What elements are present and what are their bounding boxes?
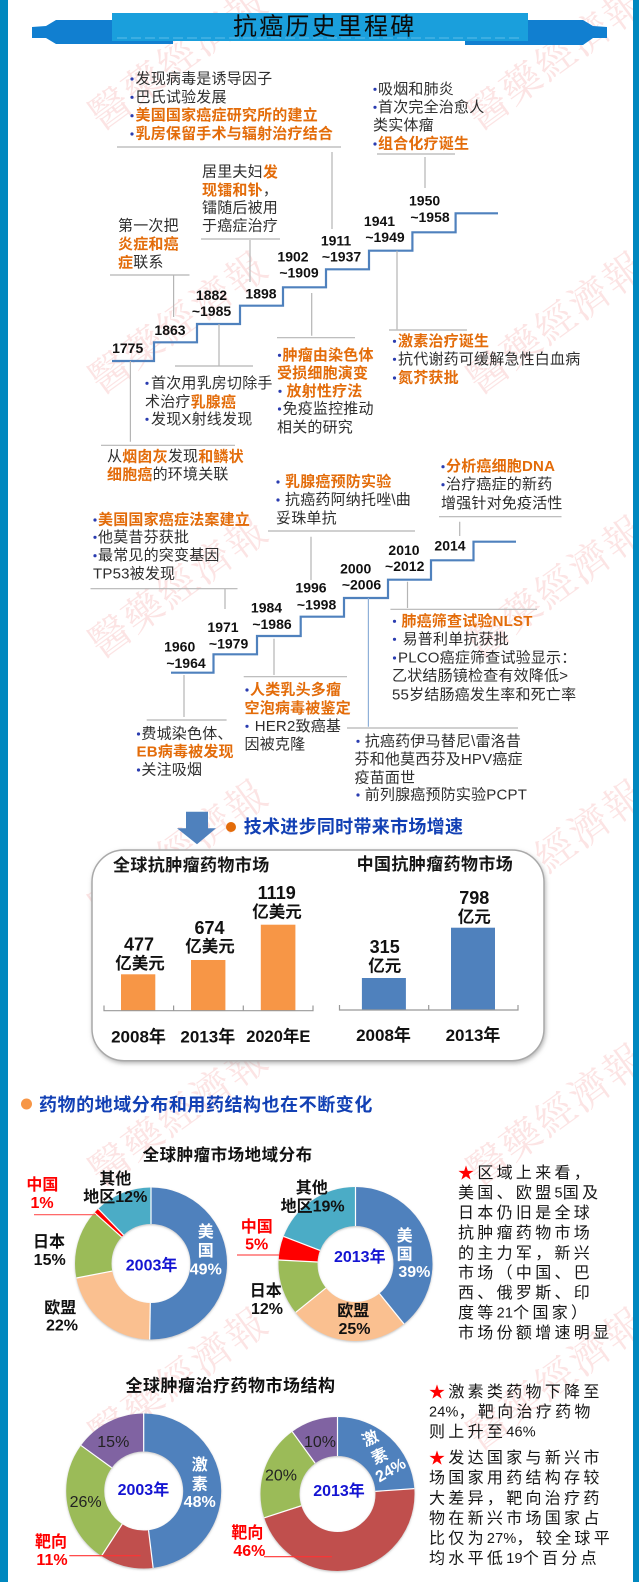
- donut chart: 2003 region: 国: [198, 1243, 214, 1260]
- donut chart: 2003 region: 中国: [26, 1176, 58, 1194]
- donut chart: 2013 structure: 激: [360, 1427, 382, 1450]
- timeline lower staircase: 1996: [295, 580, 327, 596]
- watermark: 醫藥經濟報: [75, 1292, 279, 1461]
- timeline upper staircase: 1863: [154, 322, 186, 338]
- callout: 2000-2006: 芬和他莫西芬及HPV癌症: [354, 751, 523, 768]
- timeline upper staircase: ~1958: [410, 209, 450, 225]
- side border right: [633, 0, 639, 1582]
- timeline lower staircase: ~2012: [385, 558, 425, 574]
- donut chart: 2013 region: 25%: [338, 1321, 371, 1338]
- callout: 1950-1958: 组合化疗诞生: [378, 134, 469, 152]
- donut chart: 2013 structure: 2013年: [313, 1481, 365, 1500]
- callout: 1863: 炎症和癌: [118, 235, 179, 253]
- bar chart: China market: 315: [370, 937, 400, 957]
- donut chart: 2013 region: 日本: [250, 1282, 282, 1300]
- callout: 2010-2012: 肺癌筛查试验NLST: [401, 612, 533, 630]
- donut chart: 2003 region: [26, 1170, 222, 1339]
- timeline lower staircase: ~1979: [209, 635, 248, 651]
- title: 抗癌历史里程碑: [233, 14, 416, 40]
- bar chart: China market: 中国抗肿瘤药物市场: [357, 854, 513, 874]
- bar chart: global market: 1119: [258, 883, 296, 903]
- callout: 1775: 从烟囱灰发现和鳞状: [107, 447, 244, 465]
- callout: 2014: [439, 457, 563, 536]
- side border left: [0, 0, 8, 1582]
- timeline lower staircase: ~1998: [297, 596, 336, 612]
- callout: 1984-1986: 人类乳头多瘤: [250, 680, 341, 698]
- callout: 2014: 治疗癌症的新药: [446, 476, 552, 493]
- callout: 1960-1964: 关注吸烟: [141, 762, 202, 778]
- callout: 1902-1909: 放射性疗法: [286, 382, 363, 400]
- callout: 1950-1958: 类实体瘤: [373, 117, 434, 134]
- callout: 1863: [110, 216, 190, 317]
- bar chart: China market: 798: [459, 888, 489, 908]
- timeline lower staircase: ~1986: [252, 616, 292, 632]
- callout: 1911-1937: 巴氏试验发展: [136, 89, 227, 106]
- timeline upper staircase: 1950: [409, 193, 440, 209]
- callout: 2010-2012: 易普利单抗获批: [403, 631, 509, 648]
- text block: structure commentary: 则上升至46%: [429, 1423, 536, 1441]
- donut chart: 2013 structure: 靶向: [231, 1524, 263, 1542]
- donut chart: 2013 region: 中国: [241, 1218, 273, 1236]
- text block: structure commentary: 物在新兴市场国家占: [429, 1510, 603, 1528]
- donut chart: 2003 structure: 11%: [36, 1552, 68, 1569]
- donut chart: 2013 region: [237, 1179, 430, 1338]
- watermark: 醫藥經濟報: [75, 236, 279, 405]
- callout: 1902-1909: 相关的研究: [277, 419, 353, 436]
- callout: 1984-1986: HER2致癌基: [255, 718, 341, 735]
- bar chart: China market: 2008年: [356, 1025, 411, 1045]
- text block: structure commentary: 大差异，靶向治疗药: [429, 1490, 603, 1508]
- callout: 1984-1986: 因被克隆: [244, 736, 305, 753]
- timeline upper staircase: ~1909: [279, 265, 319, 281]
- callout: 1960-1964: 费城染色体、: [141, 726, 233, 742]
- callout: 1911-1937: 美国国家癌症研究所的建立: [136, 106, 318, 124]
- timeline upper staircase: 1902: [277, 249, 309, 265]
- callout: 1863: 第一次把: [118, 216, 179, 234]
- text block: structure commentary: 比仅为27%，较全球平: [429, 1530, 613, 1548]
- donut chart: 2013 region: 欧盟: [337, 1302, 369, 1320]
- callout: 1882-1985: 发现X射线发现: [151, 411, 252, 428]
- donut chart: 2003 region: 地区12%: [83, 1188, 147, 1206]
- watermark: 醫藥經濟報: [75, 500, 279, 669]
- text block: regional commentary: 市场（中国、巴: [458, 1264, 593, 1282]
- callout: 2000-2006: [347, 598, 527, 804]
- bar chart: global market: 2020年E: [246, 1026, 310, 1046]
- donut chart: 2003 region: 2003年: [126, 1256, 177, 1274]
- bar chart: China market: [340, 854, 518, 1045]
- callout: 2010-2012: [390, 582, 576, 704]
- callout: 1941-1949: [389, 251, 580, 386]
- title banner: [32, 13, 607, 45]
- donut chart: 2013 structure: 46%: [233, 1543, 265, 1560]
- callout: 1882-1985: [145, 324, 273, 428]
- callout: 1902-1909: 免疫监控推动: [282, 400, 374, 418]
- callout: 1898: 居里夫妇发: [202, 162, 278, 180]
- timeline upper staircase: ~1937: [322, 249, 361, 265]
- panel: market bar charts: [92, 850, 544, 1061]
- text block: structure commentary: [429, 1383, 613, 1568]
- donut chart: 2003 structure: 素: [192, 1476, 208, 1494]
- callout: 1898: 于癌症治疗: [202, 218, 278, 234]
- text block: regional commentary: 日本仍旧是全球: [458, 1204, 593, 1222]
- timeline lower staircase: 2010: [388, 542, 420, 558]
- callout: 1996-1998: [268, 472, 415, 580]
- callout: 1898: [201, 162, 280, 282]
- donut chart: 2013 region: 12%: [251, 1301, 283, 1318]
- donut chart: 2003 region: 15%: [34, 1252, 66, 1269]
- callout: 1971-1979: 他莫昔芬获批: [98, 529, 189, 546]
- text block: regional commentary: 市场份额增速明显: [458, 1324, 612, 1342]
- donut chart: 2003 structure: 48%: [184, 1494, 216, 1511]
- callout: 1898: 现镭和钋，: [202, 180, 278, 198]
- callout: 1775: [101, 361, 244, 483]
- callout: 1960-1964: [136, 675, 234, 778]
- text block: structure commentary: 均水平低19个百分点: [429, 1550, 600, 1568]
- timeline lower staircase: ~2006: [342, 577, 381, 593]
- donut chart: 2003 structure: 26%: [70, 1494, 102, 1511]
- bar chart: global market: 674: [194, 918, 225, 938]
- callout: 1902-1909: [277, 293, 374, 436]
- callout: 1960-1964: EB病毒被发现: [136, 742, 234, 760]
- callout: 1863: 症联系: [118, 254, 164, 271]
- timeline lower staircase: 2000: [340, 561, 371, 577]
- timeline lower staircase: 1984: [251, 600, 282, 616]
- bar chart: global market: [104, 855, 313, 1046]
- callout: 2000-2006: 疫苗面世: [354, 770, 415, 786]
- text block: structure commentary: 24%，靶向治疗药物: [429, 1403, 594, 1421]
- callout: 1984-1986: 空泡病毒被鉴定: [244, 699, 351, 717]
- callout: 1902-1909: 受损细胞演变: [277, 364, 368, 382]
- donut chart: 2003 region: 日本: [33, 1233, 65, 1251]
- chart title: regional: 全球肿瘤市场地域分布: [143, 1145, 313, 1165]
- callout: 2010-2012: PLCO癌症筛查试验显示：: [398, 650, 576, 666]
- timeline upper staircase: ~1949: [365, 229, 405, 245]
- callout: 1950-1958: [373, 81, 484, 188]
- timeline upper staircase: 1898: [245, 286, 277, 302]
- callout: 2010-2012: 乙状结肠镜检查有效降低>: [392, 666, 568, 684]
- callout: 2014: 增强针对免疫活性: [441, 495, 563, 512]
- donut chart: 2013 region: 美: [397, 1226, 413, 1245]
- donut chart: 2013 structure: 素: [369, 1445, 391, 1468]
- callout: 1984-1986: [244, 639, 351, 753]
- callout: 1911-1937: 发现病毒是诱导因子: [136, 70, 272, 88]
- callout: 1941-1949: 抗代谢药可缓解急性白血病: [398, 351, 580, 368]
- callout: 2010-2012: 55岁结肠癌发生率和死亡率: [392, 686, 576, 704]
- text block: regional commentary: 抗肿瘤药物市场: [458, 1224, 593, 1242]
- callout: 1996-1998: 妥珠单抗: [276, 510, 337, 527]
- text block: regional commentary: 度等21个国家）: [458, 1304, 590, 1322]
- donut chart: 2013 structure: 10%: [304, 1434, 336, 1451]
- heading: market growth: 技术进步同时带来市场增速: [244, 816, 463, 837]
- text block: regional commentary: ★区域上来看，: [458, 1164, 593, 1182]
- text block: regional commentary: 的主力军，新兴: [458, 1244, 593, 1262]
- donut chart: 2013 region: 39%: [398, 1264, 430, 1281]
- callout: 1996-1998: 抗癌药阿纳托唑\曲: [285, 492, 411, 508]
- callout: 1971-1979: 美国国家癌症法案建立: [98, 510, 250, 528]
- callout: 1882-1985: 首次用乳房切除手: [151, 375, 273, 392]
- text block: regional commentary: 西、俄罗斯、印: [458, 1284, 593, 1302]
- callout: 1950-1958: 吸烟和肺炎: [378, 81, 454, 98]
- donut chart: 2003 region: 其他: [99, 1170, 131, 1188]
- timeline upper staircase: 1941: [364, 213, 395, 229]
- donut chart: 2003 structure: [35, 1414, 216, 1569]
- bar chart: global market: 2013年: [180, 1026, 235, 1046]
- donut chart: 2003 structure: 2003年: [118, 1480, 169, 1499]
- bar chart: China market: 亿元: [458, 908, 491, 927]
- watermark: 醫藥經濟報: [75, 764, 279, 933]
- donut chart: 2003 region: 1%: [30, 1195, 54, 1212]
- callout: 1941-1949: 氮芥获批: [398, 368, 459, 386]
- bar chart: global market: 全球抗肿瘤药物市场: [113, 855, 270, 875]
- timeline lower staircase: 1960: [164, 639, 195, 655]
- callout: 1996-1998: 乳腺癌预防实验: [285, 472, 391, 490]
- donut chart: 2013 structure: [231, 1417, 414, 1560]
- heading: regional distribution: 药物的地域分布和用药结构也在不断变化: [39, 1094, 373, 1115]
- callout: 1971-1979: TP53被发现: [93, 566, 175, 582]
- donut chart: 2013 region: 地区19%: [281, 1198, 345, 1216]
- chart title: structure: 全球肿瘤治疗药物市场结构: [126, 1376, 336, 1396]
- callout: 1950-1958: 首次完全治愈人: [378, 98, 484, 116]
- timeline lower staircase: 2014: [434, 538, 466, 554]
- callout: 1911-1937: [117, 70, 341, 229]
- callout: 1902-1909: 肿瘤由染色体: [282, 346, 374, 364]
- timeline upper staircase: [112, 193, 498, 361]
- timeline upper staircase: 1882: [196, 287, 227, 303]
- text block: structure commentary: ★发达国家与新兴市: [429, 1449, 603, 1467]
- text block: regional commentary: 美国、欧盟5国及: [458, 1184, 601, 1202]
- callout: 1971-1979: 最常见的突变基因: [98, 547, 220, 564]
- text block: regional commentary: [458, 1164, 612, 1342]
- callout: 1882-1985: 术治疗乳腺癌: [145, 392, 236, 410]
- bar chart: China market: 2013年: [446, 1025, 500, 1045]
- callout: 2000-2006: 前列腺癌预防实验PCPT: [365, 786, 527, 804]
- bar chart: global market: 亿美元: [252, 902, 302, 922]
- arrow: down: [177, 812, 216, 844]
- donut chart: 2013 region: 2013年: [334, 1247, 386, 1266]
- callout: 1971-1979: [90, 510, 250, 609]
- bar chart: global market: 477: [124, 935, 154, 955]
- donut chart: 2003 structure: 15%: [97, 1434, 129, 1451]
- watermark: 醫藥經濟報: [75, 1028, 279, 1197]
- timeline lower staircase: 1971: [207, 619, 239, 635]
- callout: 1898: 镭随后被用: [202, 200, 278, 216]
- bar chart: global market: 2008年: [111, 1026, 166, 1046]
- callout: 1911-1937: 乳房保留手术与辐射治疗结合: [136, 124, 333, 142]
- donut chart: 2003 region: 49%: [190, 1262, 222, 1278]
- bar chart: global market: 亿美元: [115, 953, 165, 973]
- donut chart: 2013 structure: 24%: [373, 1455, 409, 1486]
- timeline upper staircase: 1911: [321, 233, 351, 249]
- callout: 2000-2006: 抗癌药伊马替尼\雷洛昔: [365, 733, 521, 750]
- text block: structure commentary: ★激素类药物下降至: [429, 1383, 603, 1401]
- bar chart: global market: 亿美元: [185, 936, 235, 956]
- timeline upper staircase: 1775: [112, 340, 143, 356]
- callout: 1941-1949: 激素治疗诞生: [398, 332, 489, 350]
- donut chart: 2003 region: 美: [198, 1222, 214, 1241]
- donut chart: 2003 structure: 激: [192, 1456, 208, 1474]
- donut chart: 2013 region: 其他: [296, 1179, 328, 1197]
- donut chart: 2013 structure: 20%: [265, 1468, 297, 1484]
- text block: structure commentary: 场国家用药结构存较: [429, 1469, 603, 1487]
- callout: 2014: 分析癌细胞DNA: [446, 457, 555, 475]
- donut chart: 2013 region: 国: [397, 1246, 413, 1264]
- donut chart: 2003 structure: 靶向: [35, 1533, 67, 1551]
- timeline lower staircase: [164, 538, 516, 673]
- timeline upper staircase: ~1985: [192, 303, 231, 319]
- timeline lower staircase: ~1964: [166, 655, 206, 671]
- donut chart: 2003 region: 22%: [46, 1318, 78, 1334]
- donut chart: 2013 region: 5%: [245, 1236, 268, 1254]
- callout: 1775: 细胞癌的环境关联: [107, 465, 229, 483]
- donut chart: 2003 region: 欧盟: [44, 1299, 76, 1317]
- bar chart: China market: 亿元: [368, 957, 401, 976]
